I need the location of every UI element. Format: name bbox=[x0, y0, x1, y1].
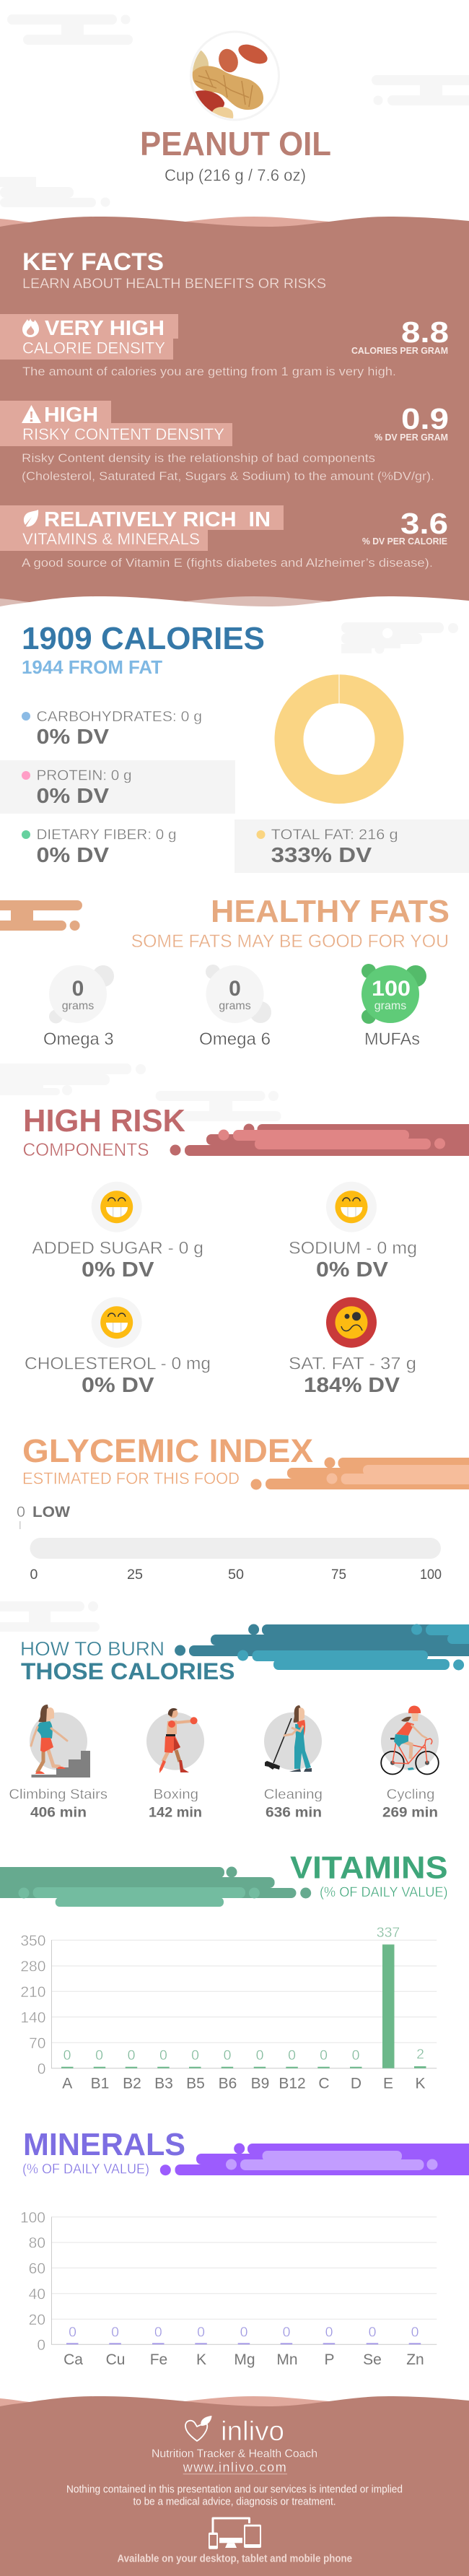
bar chart: minerals: 20 bbox=[29, 2312, 45, 2328]
decoration: high risk streak bbox=[170, 1123, 469, 1156]
bar chart: vitamins bbox=[20, 1925, 437, 2092]
gauge scale: 75 bbox=[331, 1567, 346, 1583]
label: climbing stairs: Climbing Stairs bbox=[9, 1787, 108, 1803]
stat: mufas: grams bbox=[374, 1000, 406, 1012]
bar chart: vitamins: 0 bbox=[224, 2048, 232, 2063]
fact: vitamins and minerals: 3.6 bbox=[400, 507, 448, 540]
item: cholesterol bbox=[25, 1297, 211, 1397]
bar chart: minerals: 0 bbox=[283, 2325, 291, 2341]
fact: calorie density: VERY HIGH bbox=[45, 317, 165, 340]
legend: dietary fiber: DIETARY FIBER: 0 g bbox=[36, 827, 176, 843]
activity: boxing bbox=[146, 1708, 204, 1773]
activity: climbing stairs bbox=[30, 1705, 90, 1777]
bar chart: vitamins: 0 bbox=[256, 2048, 264, 2063]
title: PEANUT OIL bbox=[140, 125, 331, 162]
gauge scale bbox=[30, 1567, 442, 1583]
bar chart: vitamins: 0 bbox=[95, 2048, 103, 2063]
stat: mufas: 100 bbox=[372, 977, 411, 1001]
stat: omega 6: grams bbox=[219, 1000, 251, 1012]
bar chart: vitamins: 2 bbox=[416, 2047, 424, 2063]
label: climbing stairs: 406 min bbox=[30, 1805, 87, 1821]
item: cholesterol: 0% DV bbox=[82, 1374, 154, 1397]
disclaimer bbox=[66, 2484, 403, 2507]
bar chart: vitamins: 0 bbox=[191, 2048, 199, 2063]
heading: healthy fats: HEALTHY FATS bbox=[211, 894, 450, 929]
bar chart: vitamins: B1 bbox=[91, 2075, 109, 2092]
bar chart: minerals: 0 bbox=[69, 2325, 76, 2341]
bar chart: minerals: 0 bbox=[240, 2325, 248, 2341]
item: sodium bbox=[289, 1182, 417, 1282]
decoration: minerals streak bbox=[160, 2143, 469, 2175]
panel: calories bbox=[0, 621, 469, 873]
fact: calorie density bbox=[0, 314, 449, 378]
legend: total fat bbox=[257, 827, 398, 867]
bar chart: minerals: Se bbox=[363, 2351, 382, 2368]
item: added sugar: 0% DV bbox=[82, 1258, 154, 1282]
bar chart: vitamins: 337 bbox=[377, 1925, 400, 1941]
fact: vitamins and minerals: A good source of Vitamin E (fights diabetes and Alzheimer’s disease). bbox=[22, 556, 433, 570]
subheading: ESTIMATED FOR THIS FOOD bbox=[22, 1469, 240, 1488]
activity: cleaning bbox=[264, 1705, 322, 1772]
bar chart: minerals: K bbox=[196, 2351, 206, 2368]
fact: calorie density: CALORIES PER GRAM bbox=[351, 345, 448, 356]
fact: risky content density: HIGH bbox=[44, 404, 98, 427]
legend: protein: PROTEIN: 0 g bbox=[36, 768, 131, 784]
label: cycling: 269 min bbox=[382, 1805, 438, 1821]
heading: vitamins: VITAMINS bbox=[290, 1850, 448, 1886]
bar chart: vitamins: B9 bbox=[251, 2075, 269, 2092]
legend: protein bbox=[22, 768, 131, 808]
legend: protein: 0% DV bbox=[36, 785, 110, 808]
bar chart: minerals: Cu bbox=[106, 2351, 125, 2368]
serving size: Cup (216 g / 7.6 oz) bbox=[165, 166, 306, 185]
bar chart: vitamins: 140 bbox=[20, 2009, 45, 2026]
bar chart: minerals: 0 bbox=[369, 2325, 377, 2341]
label: cycling: Cycling bbox=[387, 1787, 434, 1803]
fact: risky content density: Risky Content density is the relationship of bad components bbox=[22, 451, 375, 465]
fact: risky content density bbox=[0, 401, 449, 483]
panel: header bbox=[0, 14, 469, 207]
heading: how to burn: HOW TO BURN bbox=[20, 1637, 165, 1660]
bar chart: vitamins: 0 bbox=[352, 2048, 360, 2063]
label: cycling bbox=[382, 1787, 438, 1821]
logo: inlivo: inlivo bbox=[221, 2416, 284, 2447]
fact: calorie density: CALORIE DENSITY bbox=[22, 339, 165, 357]
gauge scale: 100 bbox=[420, 1567, 442, 1583]
bar chart: minerals: Fe bbox=[150, 2351, 167, 2368]
heading: high risk: HIGH RISK bbox=[23, 1103, 185, 1139]
heading: those calories: THOSE CALORIES bbox=[21, 1658, 235, 1684]
bar chart: vitamins: A bbox=[62, 2075, 72, 2092]
legend background bbox=[0, 760, 235, 814]
item: added sugar bbox=[32, 1182, 203, 1282]
legend: dietary fiber: 0% DV bbox=[36, 844, 110, 867]
item: added sugar: ADDED SUGAR - 0 g bbox=[32, 1239, 203, 1258]
gauge scale: 25 bbox=[127, 1567, 143, 1583]
heading: calories: 1909 CALORIES bbox=[22, 621, 265, 656]
stat: omega 3: 0 bbox=[72, 977, 84, 1001]
bar chart: minerals: 60 bbox=[29, 2260, 45, 2277]
stat: omega 6: 0 bbox=[229, 977, 241, 1001]
legend: total fat: TOTAL FAT: 216 g bbox=[271, 827, 398, 843]
bar chart: minerals: 40 bbox=[29, 2286, 45, 2302]
legend: carbohydrates: 0% DV bbox=[36, 726, 110, 749]
subheading: components: COMPONENTS bbox=[23, 1140, 149, 1160]
stat: omega 3: grams bbox=[62, 1000, 94, 1012]
fact: vitamins and minerals: % DV PER CALORIE bbox=[362, 536, 447, 547]
subheading: (% OF DAILY VALUE) bbox=[22, 2162, 149, 2177]
bar chart: vitamins: 210 bbox=[20, 1984, 45, 2001]
bar chart: minerals: Ca bbox=[63, 2351, 83, 2368]
icon: flame bbox=[22, 318, 39, 337]
subheading: SOME FATS MAY BE GOOD FOR YOU bbox=[131, 931, 449, 952]
tagline: Nutrition Tracker & Health Coach bbox=[152, 2447, 317, 2460]
panel: glycemic index bbox=[0, 1432, 469, 1632]
bar chart: vitamins: D bbox=[351, 2075, 361, 2092]
panel: vitamins bbox=[0, 1850, 448, 2092]
disclaimer: Nothing contained in this presentation and our services is intended or implied bbox=[66, 2484, 403, 2495]
fact: risky content density: % DV PER GRAM bbox=[374, 432, 448, 443]
item: saturated fat: SAT. FAT - 37 g bbox=[289, 1354, 416, 1374]
label: cleaning: Cleaning bbox=[264, 1787, 323, 1803]
website link: www.inlivo.com bbox=[183, 2460, 286, 2474]
panel: healthy fats bbox=[0, 894, 450, 1121]
item: saturated fat bbox=[289, 1297, 416, 1397]
bar chart: vitamins: 0 bbox=[320, 2048, 328, 2063]
heading: key facts: KEY FACTS bbox=[22, 248, 164, 276]
bar chart: vitamins: B2 bbox=[123, 2075, 141, 2092]
bar chart: minerals: 0 bbox=[111, 2325, 119, 2341]
icon: devices bbox=[209, 2518, 261, 2549]
heading: minerals: MINERALS bbox=[23, 2127, 185, 2162]
fact: calorie density: The amount of calories you are getting from 1 gram is very high. bbox=[22, 365, 396, 378]
logo: inlivo bbox=[185, 2416, 284, 2447]
panel: minerals bbox=[20, 2127, 469, 2368]
fact: calorie density: 8.8 bbox=[401, 316, 449, 349]
decoration: healthy fats streak bbox=[0, 900, 82, 931]
bar chart: vitamins: 0 bbox=[159, 2048, 167, 2063]
gauge scale: 50 bbox=[228, 1567, 244, 1583]
label: boxing bbox=[149, 1787, 202, 1821]
icon: leaf bbox=[24, 510, 38, 526]
panel: footer bbox=[0, 2396, 469, 2576]
bar chart: vitamins: K bbox=[415, 2075, 426, 2092]
panel: high risk components bbox=[23, 1103, 469, 1397]
stat: omega 6: Omega 6 bbox=[199, 1030, 271, 1049]
subheading: (% OF DAILY VALUE) bbox=[320, 1884, 448, 1900]
item: sodium: 0% DV bbox=[316, 1258, 389, 1282]
label: climbing stairs bbox=[9, 1787, 108, 1821]
stat: mufas bbox=[361, 964, 426, 1049]
fact: vitamins and minerals bbox=[0, 505, 448, 570]
fact: vitamins and minerals: VITAMINS & MINERALS bbox=[22, 530, 200, 548]
bar chart: vitamins: B5 bbox=[186, 2075, 205, 2092]
bar chart: vitamins: 350 bbox=[20, 1933, 45, 1949]
panel: how to burn calories bbox=[9, 1624, 469, 1821]
item: cholesterol: CHOLESTEROL - 0 mg bbox=[25, 1354, 211, 1374]
bar chart: minerals: 0 bbox=[37, 2337, 45, 2354]
bar chart: minerals: Zn bbox=[406, 2351, 424, 2368]
bar chart: vitamins: 0 bbox=[38, 2061, 45, 2077]
bar chart: vitamins: 0 bbox=[128, 2048, 136, 2063]
stat: mufas: MUFAs bbox=[364, 1030, 420, 1049]
label: cleaning: 636 min bbox=[266, 1805, 322, 1821]
bar chart: minerals: 0 bbox=[325, 2325, 333, 2341]
bar chart: vitamins: 70 bbox=[29, 2035, 45, 2052]
decoration: burn streak bbox=[175, 1624, 469, 1671]
gauge scale: 0 bbox=[30, 1567, 38, 1583]
legend: total fat: 333% DV bbox=[271, 844, 372, 867]
bar chart: minerals: Mn bbox=[276, 2351, 298, 2368]
bar chart: minerals: P bbox=[324, 2351, 335, 2368]
stat: omega 6 bbox=[199, 965, 271, 1049]
legend: carbohydrates: CARBOHYDRATES: 0 g bbox=[36, 709, 202, 725]
bar chart: vitamins: 280 bbox=[20, 1959, 45, 1975]
subheading: LEARN ABOUT HEALTH BENEFITS OR RISKS bbox=[22, 277, 326, 292]
bar chart: minerals: Mg bbox=[234, 2351, 255, 2368]
bar chart: vitamins: B3 bbox=[154, 2075, 173, 2092]
item: sodium: SODIUM - 0 mg bbox=[289, 1239, 417, 1258]
bar chart: minerals: 0 bbox=[197, 2325, 205, 2341]
icon: warning triangle bbox=[22, 405, 41, 423]
decoration: vitamins streak bbox=[0, 1867, 311, 1907]
bar chart: vitamins: 0 bbox=[288, 2048, 296, 2063]
decoration: glycemic streak bbox=[251, 1457, 469, 1490]
label: boxing: 142 min bbox=[149, 1805, 202, 1821]
activity: cycling bbox=[381, 1705, 439, 1775]
label: cleaning bbox=[264, 1787, 323, 1821]
bar chart: minerals bbox=[20, 2209, 437, 2368]
disclaimer: to be a medical advice, diagnosis or treatment. bbox=[133, 2496, 336, 2507]
bar chart: vitamins: B12 bbox=[279, 2075, 306, 2092]
bar chart: vitamins: B6 bbox=[219, 2075, 237, 2092]
availability note: Available on your desktop, tablet and mobile phone bbox=[117, 2552, 352, 2564]
legend: carbohydrates bbox=[22, 709, 202, 749]
gauge marker: LOW bbox=[32, 1504, 70, 1520]
legend: dietary fiber bbox=[22, 827, 176, 867]
bar chart: minerals: 0 bbox=[154, 2325, 162, 2341]
stat: omega 3 bbox=[43, 965, 114, 1049]
bar chart: minerals: 80 bbox=[29, 2235, 45, 2252]
fact: risky content density: (Cholesterol, Saturated Fat, Sugars & Sodium) to the amount (%DV/gr). bbox=[22, 469, 434, 483]
panel: key facts bbox=[0, 217, 469, 618]
donut chart bbox=[289, 674, 390, 789]
fact: risky content density: RISKY CONTENT DENSITY bbox=[22, 425, 224, 443]
icon: peanut photo bbox=[190, 32, 279, 123]
gauge marker: 0 bbox=[17, 1504, 25, 1520]
bar chart: minerals: 100 bbox=[20, 2209, 45, 2226]
label: boxing: Boxing bbox=[154, 1787, 198, 1803]
bar chart: minerals: 0 bbox=[411, 2325, 419, 2341]
fact: vitamins and minerals: RELATIVELY RICH IN bbox=[44, 508, 271, 531]
bar chart: vitamins: 0 bbox=[63, 2048, 71, 2063]
heading: glycemic index: GLYCEMIC INDEX bbox=[22, 1432, 313, 1469]
fact: risky content density: 0.9 bbox=[401, 402, 449, 435]
subheading: from fat: 1944 FROM FAT bbox=[22, 656, 162, 678]
item: saturated fat: 184% DV bbox=[304, 1374, 400, 1397]
stat: omega 3: Omega 3 bbox=[43, 1030, 114, 1049]
gauge marker bbox=[17, 1504, 70, 1529]
bar chart: vitamins: C bbox=[318, 2075, 330, 2092]
bar chart: vitamins: E bbox=[383, 2075, 393, 2092]
gauge bar bbox=[30, 1538, 441, 1559]
